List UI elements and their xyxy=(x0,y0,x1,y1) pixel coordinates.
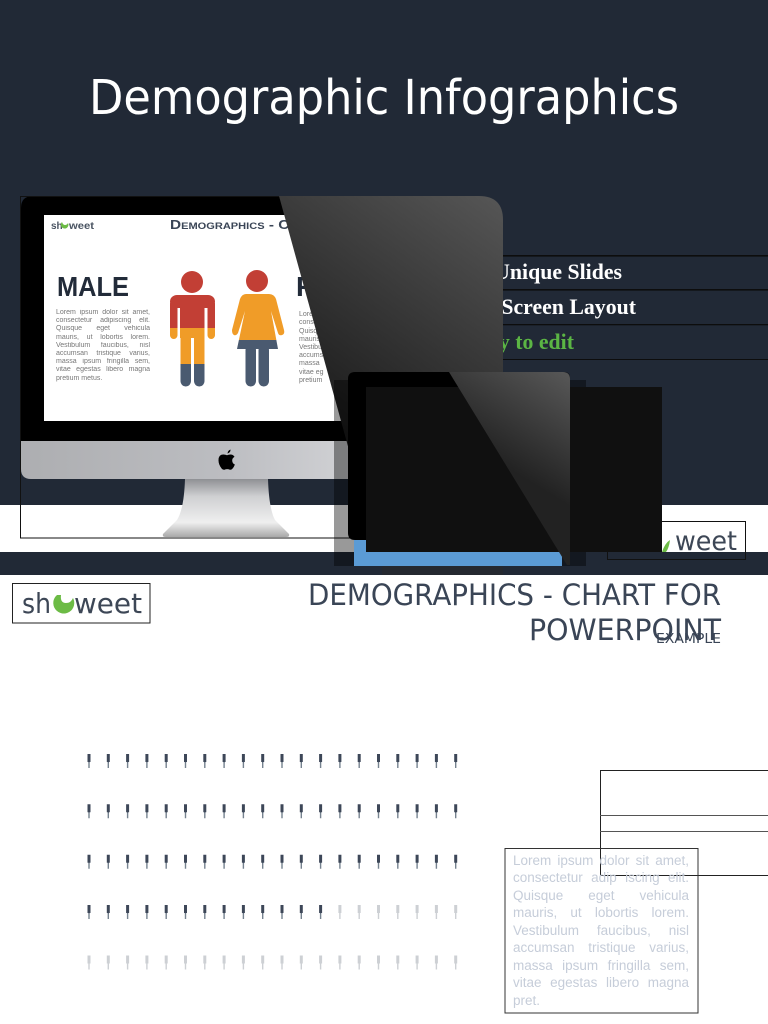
female paragraph cropped: mauris, ut xyxy=(299,336,330,343)
male paragraph: Quisque eget vehicula xyxy=(56,325,150,332)
paragraph: Lorem ipsum dolor sit amet, xyxy=(513,853,689,868)
paragraph: pret. xyxy=(513,993,540,1008)
tablet screen xyxy=(366,387,662,552)
paragraph xyxy=(513,852,689,1012)
row 4 xyxy=(87,905,457,919)
MALE heading: MALE xyxy=(57,271,129,302)
small logo: sh xyxy=(51,221,63,232)
iMac mockup xyxy=(21,197,348,537)
lorem ipsum text box xyxy=(505,848,698,1013)
small logo: weet xyxy=(68,221,95,232)
paragraph: Quisque eget vehicula xyxy=(513,888,689,903)
pictogram chart xyxy=(87,754,457,970)
feature: unique slides: 10 Unique Slides xyxy=(467,260,622,284)
paragraph: Vestibulum faucibus, nisl xyxy=(513,923,689,938)
empty outlined boxes xyxy=(600,770,768,876)
female paragraph cropped: accumsan xyxy=(299,352,331,359)
logo letters weet: weet xyxy=(74,587,142,620)
paragraph: vitae egestas libero magna xyxy=(513,975,689,990)
bezel xyxy=(21,196,433,441)
dark page background xyxy=(0,0,768,575)
logo green mark xyxy=(53,595,74,614)
male paragraph: mauris, ut lobortis lorem. xyxy=(56,334,150,341)
female paragraph cropped: pretium xyxy=(299,377,323,384)
faint strip under tablet xyxy=(382,566,503,575)
tablet body xyxy=(348,372,570,540)
female paragraph cropped: Quisque xyxy=(299,328,325,335)
tablet glare xyxy=(449,372,570,565)
row 5 xyxy=(87,956,457,970)
row 1 xyxy=(87,754,457,768)
tablet blue edge xyxy=(354,530,562,566)
male paragraph: massa ipsum fringilla sem, xyxy=(56,358,150,365)
female paragraph cropped: vitae eg xyxy=(299,369,324,376)
row 2 xyxy=(87,804,457,818)
feature list xyxy=(447,255,768,360)
white lower section xyxy=(0,575,768,1024)
paragraph: massa ipsum fringilla sem, xyxy=(513,958,689,973)
female paragraph cropped: Lorem ipsum xyxy=(299,311,340,318)
small logo xyxy=(51,222,94,229)
slide heading: POWERPOINT xyxy=(529,613,721,647)
male paragraph: pretium metus. xyxy=(56,375,102,382)
male paragraph: Lorem ipsum dolor sit amet, xyxy=(56,309,150,316)
screen xyxy=(44,215,341,421)
apple logo xyxy=(218,450,235,470)
subheading: example: EXAMPLE xyxy=(656,631,721,647)
logo: showeet xyxy=(12,584,150,623)
paragraph: consectetur adip iscing elit. xyxy=(513,870,689,885)
slide title: Demographics - Chart xyxy=(170,218,321,232)
female paragraph cropped: Vestibulum xyxy=(299,344,333,351)
translucent shadow panel xyxy=(334,380,586,566)
male paragraph: vitae egestas libero magna xyxy=(56,366,150,373)
slide heading: DEMOGRAPHICS - CHART FOR xyxy=(308,578,721,612)
paragraph: accumsan tristique varius, xyxy=(513,940,689,955)
paragraph: mauris, ut lobortis lorem. xyxy=(513,905,689,920)
feature: easy to edit: Easy to edit xyxy=(465,330,575,354)
feature: screen layout: Wide Screen Layout xyxy=(447,295,637,319)
top-right logo box xyxy=(608,522,746,560)
tablet mockup xyxy=(348,372,662,566)
title: Demographic Infographics xyxy=(89,70,679,126)
row 3 xyxy=(87,855,457,869)
logo text clipped by band: weet xyxy=(675,526,737,557)
iMac screen glare xyxy=(279,196,503,450)
white band xyxy=(0,505,768,552)
male paragraph xyxy=(56,309,150,385)
frame outline xyxy=(20,196,432,538)
female figure xyxy=(232,270,284,386)
chin xyxy=(21,441,361,479)
female paragraph cropped: massa xyxy=(299,360,320,367)
FEMALE heading cropped: FEMALE xyxy=(296,271,411,302)
stand xyxy=(163,479,289,537)
male paragraph: accumsan tristique varius, xyxy=(56,350,150,357)
slide heading xyxy=(308,578,721,647)
male paragraph: Vestibulum faucibus, nisl xyxy=(56,342,150,349)
female paragraph cropped: consectetur xyxy=(299,319,336,326)
male figure xyxy=(170,271,215,386)
female paragraph cropped xyxy=(299,311,324,384)
male paragraph: consectetur adipiscing elit. xyxy=(56,317,150,324)
logo letters sh: sh xyxy=(22,587,51,620)
